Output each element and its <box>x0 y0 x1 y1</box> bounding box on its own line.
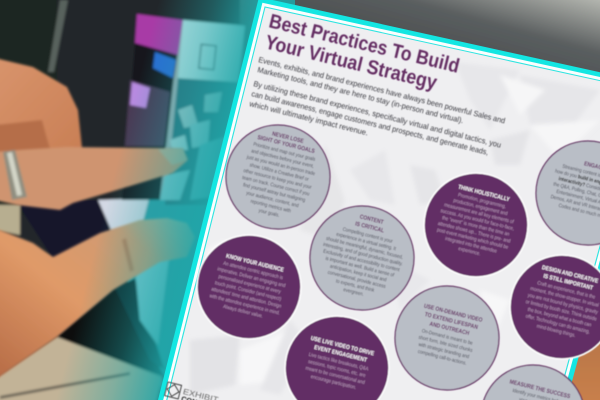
circle: know your audience: with the attendee experience in mind. <box>209 293 280 317</box>
circle: design and creative: the box, beyond what a booth can <box>527 307 592 329</box>
circle: design and creative: you are not bound by physics, gravity <box>527 292 599 316</box>
circle: on-demand video: with strategic branding and <box>418 342 470 361</box>
circle: content is critical: is important as well. Build a sense of <box>325 255 395 279</box>
circle: think holistically: measurement are all key elements of <box>443 202 515 226</box>
intro text: By utilizing these brand experiences, specifically virtual and digital tactics, you <box>253 79 502 150</box>
circle: use live video: sessions, topic rooms, etc. are <box>307 359 366 379</box>
circle: never lose sight of your goals: just as you would an in-person trade <box>245 154 316 177</box>
booth cubes <box>178 105 198 128</box>
wrinkle <box>122 238 134 272</box>
title: Your Virtual Strategy <box>263 31 440 94</box>
circle: think holistically: THINK HOLISTICALLY <box>457 184 510 203</box>
logo: exhibit concepts <box>164 382 223 400</box>
circle: on-demand video: short form, bite sized chunks <box>418 334 474 354</box>
circle: content is critical <box>299 195 425 321</box>
circle: content is critical: should be meaningful, dynamic, focused, <box>325 235 404 261</box>
intro text: Events, exhibits, and brand experiences have always been powerful Sales and <box>258 55 506 125</box>
circle: never lose sight of your goals: team on track. Course correct if you <box>241 175 310 198</box>
circle: think holistically: Promotion, programming, <box>457 192 507 210</box>
circle: use live video: EVENT ENGAGEMENT <box>313 345 368 364</box>
circle: design and creative: IS STILL IMPORTANT <box>543 273 594 292</box>
circle: on-demand video: On-Demand is meant to be <box>421 328 474 347</box>
circle: content is critical: conversational, provide access <box>327 269 387 290</box>
circle: content is critical: Compelling content is your <box>342 226 394 245</box>
fingernail <box>158 148 187 165</box>
circle: never lose sight of your goals: and objectives before your event, <box>251 148 314 170</box>
circle: on-demand video: TO EXTEND LIFESPAN <box>424 312 478 331</box>
circle: content is critical: evergreen. <box>343 287 364 298</box>
intro text: which will ultimately impact revenue. <box>248 99 369 137</box>
circle: think holistically: attendee shows up... There is pre- and <box>437 221 511 245</box>
circle: never lose sight of your goals: show. Utilize a Creative Brief or <box>249 162 310 183</box>
circle: know your audience: touch point. Consider (and respect) <box>214 280 282 303</box>
pointing finger <box>0 147 188 210</box>
circle: never lose sight of your goals <box>215 114 341 240</box>
circle: think holistically: production, engagement and <box>453 198 508 217</box>
intro text: can build awareness, engage customers and prospects, and generate leads, <box>251 89 489 157</box>
circle: think holistically: integrated into the attendee <box>444 236 498 255</box>
circle: know your audience: personalised experience at every <box>218 274 282 296</box>
circle: know your audience: attendees' time and attention. Design <box>211 286 282 310</box>
circle: design and creative: Craft an experience, that is the <box>537 280 596 301</box>
circle: measure the success <box>470 354 596 400</box>
icon: logo mark <box>165 382 182 399</box>
circle: never lose sight of your goals: SIGHT OF YOUR GOALS <box>257 135 316 155</box>
circle: think holistically: the "event" is more than the time an <box>441 215 510 238</box>
circle: know your audience: KNOW YOUR AUDIENCE <box>225 253 285 274</box>
hand <box>0 58 195 380</box>
circle: know your audience: imperative. Deliver an engaging and <box>217 266 286 289</box>
circle: engage <box>525 130 600 256</box>
circle: never lose sight of your goals: your goals. <box>258 208 280 219</box>
circle: never lose sight of your goals: find yourself astray but realigning <box>242 182 306 204</box>
booth logo mark <box>199 44 216 70</box>
circle: design and creative: offer. Technology can do amazing, <box>525 313 591 336</box>
circle: use live video: encourage participation. <box>310 374 357 391</box>
circle: use live video: Live tactics like breakouts, Q&A <box>308 352 370 373</box>
circle: design and creative: or limited by booth size. Think outside <box>525 299 598 323</box>
booth graphic column <box>122 20 183 200</box>
intro text <box>248 55 506 157</box>
circle: never lose sight of your goals: reporting metrics with <box>250 198 292 215</box>
circle: use live video <box>274 305 400 400</box>
circle: know your audience: An attendee centric approach is <box>222 260 284 282</box>
circle: on-demand video: compelling call-to-actions. <box>417 349 467 367</box>
circle: use live video: meant to be conversational and <box>305 365 366 386</box>
circle: on-demand video: AND OUTREACH <box>429 321 470 337</box>
circle: measure the success: MEASURE THE SUCCESS <box>509 379 571 400</box>
circle: think holistically: success. As you would for face-to-face, <box>440 208 515 232</box>
teal gradient fade <box>0 0 295 400</box>
table surface <box>0 337 162 400</box>
circle: think holistically <box>413 162 539 288</box>
circle: never lose sight of your goals: NEVER LOSE <box>271 131 304 145</box>
circle: content is critical: interesting, and of good production quality. <box>322 241 403 268</box>
lower dark display <box>15 200 120 262</box>
ring <box>3 150 27 200</box>
panel: strategy sheet <box>153 0 600 400</box>
circle: content is critical: to experts, and think <box>335 278 375 294</box>
circle: content is critical: CONTENT <box>359 214 385 226</box>
circle: know your audience: Always deliver value. <box>222 304 263 320</box>
circle: on-demand video <box>384 275 510 400</box>
circle: never lose sight of your goals: Prioritize and map out your goals <box>252 141 316 163</box>
booth logo badge <box>135 14 183 55</box>
circle: design and creative: DESIGN AND CREATIVE <box>541 265 599 285</box>
circle: think holistically: post-event marketing which should be <box>436 227 509 251</box>
circle: design and creative: moment, the show-stopper. In virtual <box>530 286 599 309</box>
title: Best Practices To Build <box>267 10 462 78</box>
circle: content is critical: IS CRITICAL <box>354 221 385 235</box>
circle: use live video: USE LIVE VIDEO TO DRIVE <box>310 336 375 358</box>
circle: know your audience <box>186 224 312 350</box>
palm and thumb <box>0 218 195 380</box>
circle: design and creative: mind-blowing things. <box>536 323 576 339</box>
circle: content is critical: Exclusivity of and accessibility to content <box>322 248 401 274</box>
circle: content is critical: anticipation, keep it social and <box>329 263 387 284</box>
upper finger <box>0 58 82 150</box>
intro text: Marketing tools, and they are here to stay (in-person and virtual). <box>257 65 464 125</box>
circle: never lose sight of your goals: your audience, content, and <box>245 190 300 209</box>
circle: content is critical: experience in a virtual setting. It <box>335 231 397 253</box>
circle: never lose sight of your goals: other resource to keep you and your <box>243 168 313 191</box>
circle: design and creative <box>499 244 600 370</box>
circle: think holistically: experience. <box>458 246 481 257</box>
circle: on-demand video: USE ON-DEMAND VIDEO <box>423 303 484 324</box>
